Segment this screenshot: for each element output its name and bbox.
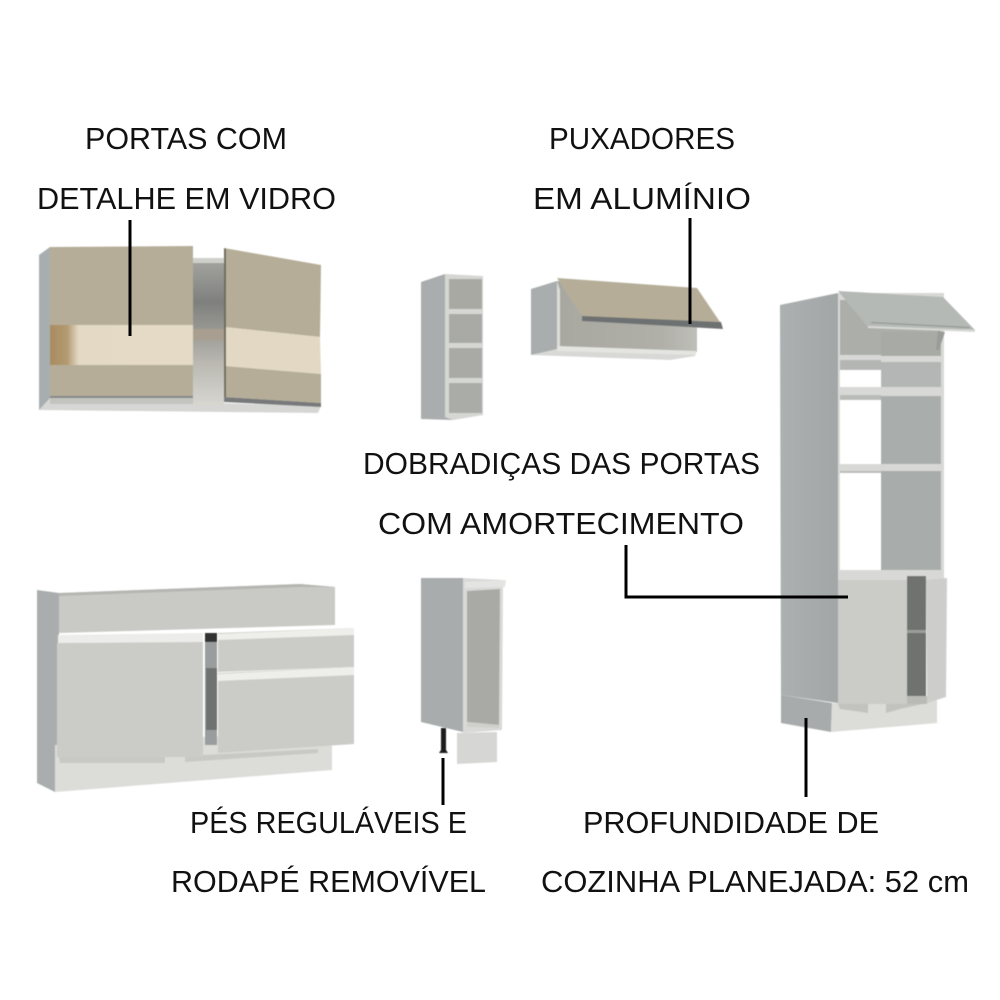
flap door with aluminium handle bbox=[557, 278, 723, 329]
drawers bbox=[218, 628, 354, 753]
label: profundidade: COZINHA PLANEJADA: 52 cm bbox=[541, 864, 969, 899]
left door bbox=[50, 246, 193, 404]
label: puxadores em aluminio: PUXADORES bbox=[549, 121, 735, 156]
label: portas com detalhe em vidro: PORTAS COM bbox=[85, 121, 287, 156]
wall cabinet with glass doors bbox=[39, 246, 321, 413]
label: dobradicas bbox=[363, 446, 760, 541]
tower flap door bbox=[838, 291, 975, 350]
adjustable foot bbox=[439, 728, 448, 753]
label: puxadores em aluminio: EM ALUMÍNIO bbox=[533, 181, 751, 216]
base cabinet with drawers bbox=[37, 584, 354, 792]
leader lines bbox=[130, 218, 848, 805]
label: profundidade bbox=[541, 805, 969, 899]
label: dobradicas: DOBRADIÇAS DAS PORTAS bbox=[363, 446, 760, 481]
open niche cabinet bbox=[421, 274, 483, 420]
label: pes regulaveis: PÉS REGULÁVEIS E bbox=[190, 805, 467, 840]
label: puxadores em aluminio bbox=[533, 121, 751, 216]
label: profundidade: PROFUNDIDADE DE bbox=[583, 805, 879, 840]
flap door wall cabinet bbox=[531, 278, 723, 360]
label: pes regulaveis: RODAPÉ REMOVÍVEL bbox=[171, 864, 486, 899]
label: pes regulaveis bbox=[171, 805, 486, 899]
tall oven tower bbox=[780, 291, 975, 732]
plinth bbox=[781, 695, 832, 732]
label: portas com detalhe em vidro: DETALHE EM VIDRO bbox=[37, 181, 336, 216]
label: dobradicas: COM AMORTECIMENTO bbox=[378, 506, 744, 541]
label: portas com detalhe em vidro bbox=[37, 121, 336, 216]
narrow base cabinet bbox=[421, 578, 506, 764]
right door bbox=[224, 248, 321, 407]
lower tower doors bbox=[838, 576, 947, 704]
